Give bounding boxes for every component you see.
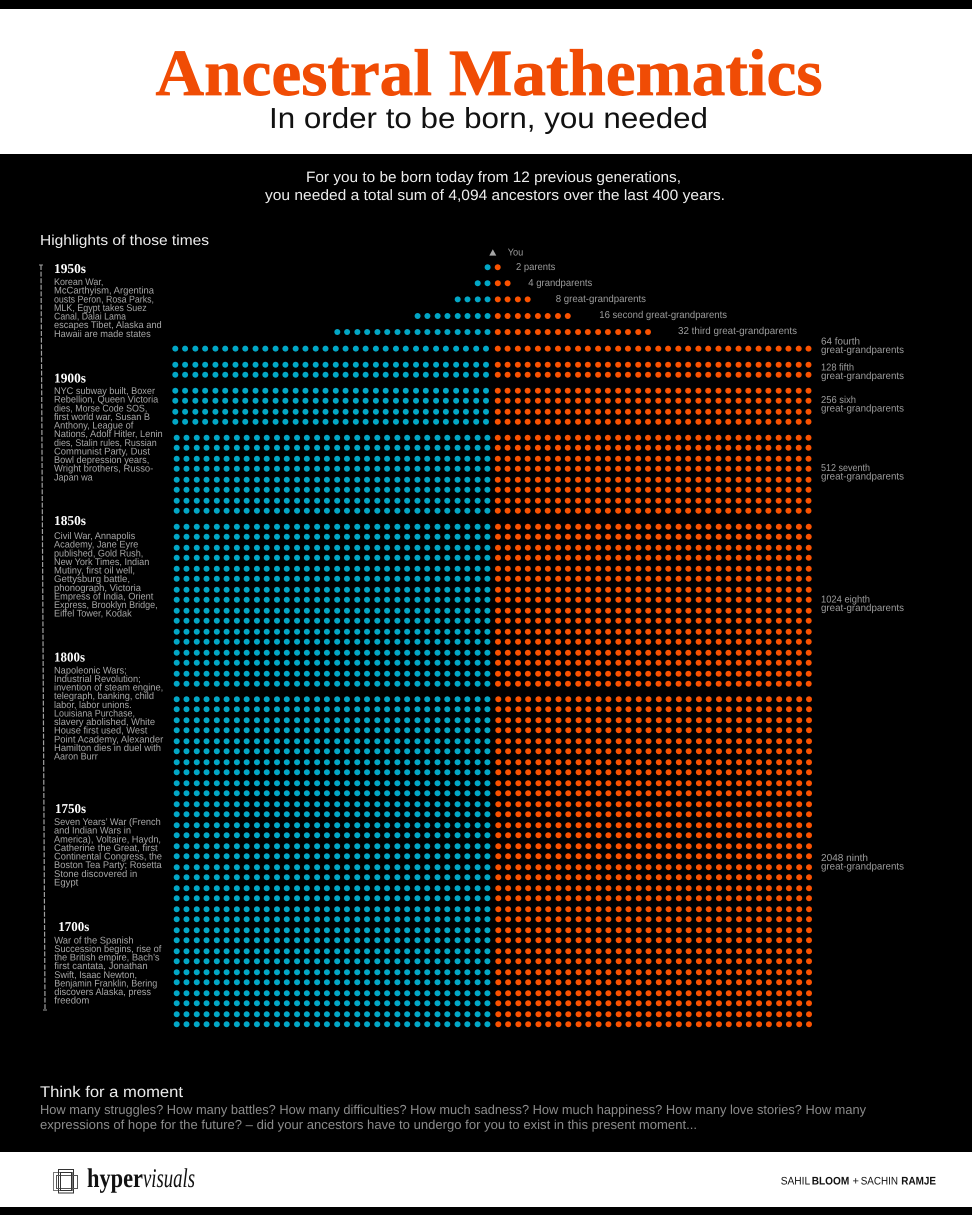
block: 1750s: [54, 801, 162, 888]
block: 1950s: 1950s: [54, 261, 86, 276]
credits: SAHIL: [781, 1176, 810, 1188]
block: 1950s: [54, 261, 162, 340]
block: 1850s: New York Times, Indian: [54, 557, 149, 568]
block: 1700s: the British empire, Bach’s: [54, 953, 160, 964]
dots: 64 fourth great-grandparents: [172, 346, 812, 352]
credits: RAMJE: [901, 1176, 936, 1188]
block: 1850s: Eiffel Tower, Kodak: [54, 609, 132, 620]
icon: you marker: [489, 249, 496, 256]
block: 1900s: 1900s: [54, 370, 86, 385]
block: 1900s: Nations, Adolf Hitler, Lenin: [54, 429, 163, 440]
label: 64 fourth: [821, 336, 904, 356]
label: you: You: [508, 247, 523, 258]
block: 1700s: War of the Spanish: [54, 935, 134, 946]
label: 16 second great-grandparents: 16 second great-grandparents: [599, 310, 727, 321]
heading: highlights: Highlights of those times: [40, 233, 209, 249]
block: 1800s: slavery abolished, White: [54, 717, 155, 728]
block: 1800s: Napoleonic Wars;: [54, 665, 127, 676]
label: 1024 eighth: [821, 594, 904, 614]
block: 1900s: Rebellion, Queen Victoria: [54, 395, 159, 406]
label: 256 sixh: great-grandparents: [821, 403, 904, 414]
dots: 4 grandparents: [475, 280, 511, 286]
block: 1950s: Canal, Dalai Lama: [54, 312, 127, 322]
block: 1800s: House first used, West: [54, 726, 148, 737]
block: 1750s: America), Voltaire, Haydn,: [54, 834, 161, 845]
label: 2048 ninth: 2048 ninth: [821, 853, 868, 864]
dots: 256 sixth great-grandparents: [172, 388, 812, 425]
label: 2048 ninth: great-grandparents: [821, 862, 904, 873]
block: 1750s: Catherine the Great, first: [54, 843, 158, 854]
block: 1950s: Korean War,: [54, 277, 103, 288]
block: 1750s: Stone discovered in: [54, 869, 137, 880]
block: 1900s: dies, Morse Code SOS,: [54, 403, 147, 414]
dots: 512 seventh great-grandparents: [174, 435, 811, 514]
panel: footer: [0, 1152, 972, 1207]
block: 1750s: Continental Congress, the: [54, 852, 162, 862]
credits: [781, 1176, 936, 1188]
block: 1850s: Mutiny, first oil well,: [54, 566, 135, 576]
dots: 2048 ninth great-grandparents: [174, 696, 812, 1027]
block: 1900s: Bowl depression years,: [54, 455, 149, 466]
dots: 1024 eighth great-grandparents: [174, 524, 812, 687]
block: 1700s: Benjamin Franklin, Bering: [54, 978, 157, 990]
heading: think for a moment: Think for a moment: [40, 1084, 184, 1101]
block: 1850s: Gettysburg battle,: [54, 574, 130, 585]
label: 4 grandparents: 4 grandparents: [528, 278, 592, 289]
intro text: For you to be born today from 12 previous generations,: [306, 169, 681, 186]
label: 512 seventh: 512 seventh: [821, 463, 870, 474]
label: 256 sixh: 256 sixh: [821, 395, 856, 406]
block: 1800s: Point Academy, Alexander: [54, 734, 164, 745]
timeline line: [39, 265, 47, 1010]
block: 1850s: Civil War, Annapolis: [54, 531, 135, 542]
label: 64 fourth: 64 fourth: [821, 336, 860, 347]
block: 1900s: [54, 370, 163, 483]
dots: 16 second great-grandparents: [415, 313, 571, 319]
intro text: [265, 169, 725, 204]
block: 1900s: NYC subway built, Boxer: [54, 386, 156, 397]
credits: BLOOM: [812, 1176, 849, 1188]
label: 512 seventh: [821, 463, 904, 482]
block: 1800s: 1800s: [54, 650, 85, 665]
body text: [40, 1102, 866, 1132]
logo wordmark: [87, 1163, 195, 1193]
intro text: you needed a total sum of 4,094 ancestors over the last 400 years.: [265, 187, 725, 204]
block: 1900s: Communist Party, Dust: [54, 446, 150, 457]
block: 1700s: Swift, Isaac Newton,: [54, 970, 137, 981]
block: 1750s: Boston Tea Party; Rosetta: [54, 860, 162, 871]
block: 1900s: Anthony, League of: [54, 420, 134, 432]
block: 1900s: Japan wa: [54, 472, 93, 483]
block: 1800s: Aaron Burr: [54, 752, 98, 763]
label: 8 great-grandparents: 8 great-grandparents: [556, 294, 646, 305]
block: 1850s: published, Gold Rush,: [54, 548, 143, 559]
block: 1900s: first world war, Susan B: [54, 412, 150, 423]
label: 1024 eighth: great-grandparents: [821, 603, 904, 614]
block: 1950s: ousts Peron, Rosa Parks,: [54, 294, 154, 305]
block: 1900s: Wright brothers, Russo-: [54, 464, 153, 475]
label: 2048 ninth: [821, 853, 904, 873]
block: 1800s: [54, 650, 164, 763]
block: 1850s: Express, Brooklyn Bridge,: [54, 600, 158, 611]
block: 1850s: Academy, Jane Eyre: [54, 540, 138, 551]
label: 1024 eighth: 1024 eighth: [821, 594, 870, 606]
closing note: [40, 1084, 866, 1132]
logo wordmark: hyper: [87, 1163, 143, 1193]
block: 1700s: 1700s: [58, 919, 89, 934]
block: 1850s: 1850s: [54, 513, 86, 528]
block: 1800s: Industrial Revolution;: [54, 674, 141, 685]
dots: 32 third great-grandparents: [334, 329, 651, 335]
label: 256 sixh: [821, 395, 904, 414]
label: 128 fifth: [821, 363, 904, 382]
subtitle: In order to be born, you needed: [269, 103, 708, 135]
block: 1950s: McCarthyism, Argentina: [54, 286, 155, 297]
block: 1950s: Hawaii are made states: [54, 329, 151, 340]
label: 512 seventh: great-grandparents: [821, 471, 904, 482]
block: 1700s: Succession begins, rise of: [54, 944, 162, 955]
block: 1950s: escapes Tibet, Alaska and: [54, 320, 162, 331]
block: 1800s: Hamilton dies in duel with: [54, 743, 161, 754]
block: 1850s: phonograph, Victoria: [54, 583, 142, 594]
block: 1700s: first cantata, Jonathan: [54, 961, 148, 972]
block: 1800s: Louisiana Purchase,: [54, 708, 135, 720]
dots: 2 parents: [485, 264, 501, 270]
block: 1800s: telegraph, banking, child: [54, 691, 154, 702]
block: 1700s: freedom: [54, 996, 89, 1007]
block: 1850s: Empress of India, Orient: [54, 591, 154, 602]
label: 128 fifth: great-grandparents: [821, 371, 904, 382]
block: 1700s: [54, 919, 162, 1007]
block: 1750s: and Indian Wars in: [54, 826, 131, 837]
block: 1950s: MLK, Egypt takes Suez: [54, 303, 147, 314]
logo wordmark: visuals: [143, 1163, 195, 1193]
icon: hypervisuals logo: [54, 1170, 78, 1193]
label: 32 third great-grandparents: 32 third great-grandparents: [678, 326, 797, 337]
body text: How many struggles? How many battles? How many difficulties? How much sadness? How much happiness? How many love stories? How many: [40, 1102, 866, 1117]
block: 1750s: Seven Years’ War (French: [54, 817, 161, 828]
block: 1750s: 1750s: [55, 801, 86, 816]
block: 1900s: dies, Stalin rules, Russian: [54, 438, 157, 449]
dots: 128 fifth great-grandparents: [172, 362, 812, 378]
body text: expressions of hope for the future? – did your ancestors have to undergo for you to exist in this present moment...: [40, 1117, 697, 1132]
block: 1800s: invention of steam engine,: [54, 683, 163, 694]
label: 64 fourth: great-grandparents: [821, 345, 904, 356]
panel: header: [0, 9, 972, 154]
label: 2 parents: 2 parents: [516, 262, 555, 273]
block: 1750s: Egypt: [54, 877, 79, 888]
label: 128 fifth: 128 fifth: [821, 363, 854, 374]
credits: SACHIN: [861, 1176, 898, 1188]
block: 1700s: discovers Alaska, press: [54, 987, 151, 998]
block: 1850s: [54, 513, 158, 620]
credits: +: [852, 1176, 859, 1188]
title: Ancestral Mathematics: [156, 37, 822, 110]
block: 1800s: labor, labor unions.: [54, 700, 132, 711]
dots: 8 great-grandparents: [455, 296, 531, 302]
